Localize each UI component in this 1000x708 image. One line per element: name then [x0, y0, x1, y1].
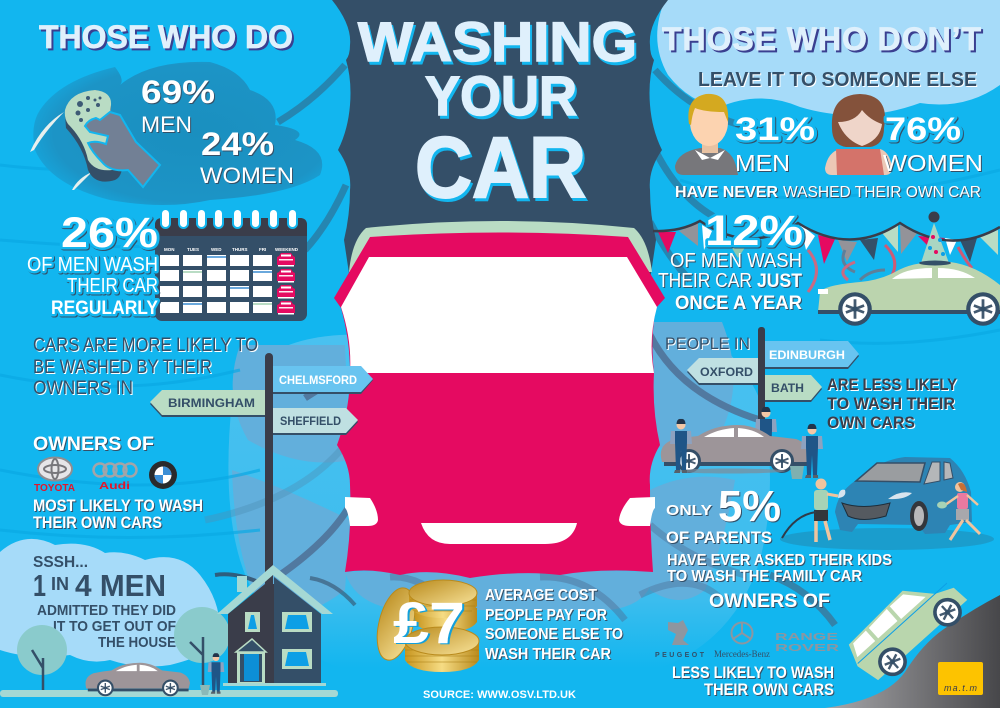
icon: man	[675, 94, 738, 175]
stat: 24% women: WOMEN	[200, 163, 294, 188]
bunting	[653, 221, 1000, 292]
grey car small	[86, 663, 190, 696]
text: sssh 1 in 4 men	[33, 554, 176, 651]
logo: peugeot	[655, 620, 705, 659]
stat: 69% men	[141, 74, 215, 137]
logo: peugeot: PEUGEOT	[655, 652, 705, 659]
logo: range rover: RANGE	[775, 632, 839, 643]
title: YOUR	[425, 64, 577, 127]
car roof outline	[349, 221, 652, 272]
title: WASHING	[358, 10, 637, 73]
heading: those who do: THOSE WHO DO	[39, 19, 293, 55]
tilted coin	[371, 584, 421, 664]
stat: 26% of men wash regularly: 26%	[61, 209, 158, 257]
car body	[334, 232, 665, 578]
blue-grey panels behind car	[232, 322, 735, 614]
logos: toyota audi bmw	[34, 458, 177, 494]
stat: only 5% of parents: 5%	[718, 482, 781, 531]
text: less likely to wash	[672, 663, 834, 699]
cloud: bottom left	[0, 539, 220, 667]
text: have never washed	[675, 184, 981, 201]
background swooshes	[205, 65, 835, 625]
stat: 31% men: 31%	[735, 111, 815, 147]
right headlight	[619, 497, 655, 526]
text: have never washed: WASHED THEIR OWN CAR	[783, 184, 981, 201]
stat: 31% men	[735, 111, 815, 176]
text: average cost: SOMEONE ELSE TO	[485, 626, 623, 643]
windscreen	[341, 257, 657, 373]
stat: 12% once a year: JUST	[757, 271, 802, 292]
glove	[85, 112, 160, 187]
stat: 12% once a year	[658, 207, 803, 314]
central title panel	[332, 0, 668, 280]
sign: edinburgh	[765, 341, 859, 369]
text: sssh 1 in 4 men: THE HOUSE	[98, 634, 176, 651]
stat: 76% women: 76%	[885, 111, 961, 147]
sign: oxford	[687, 358, 758, 385]
text: less likely to wash: LESS LIKELY TO WASH	[672, 663, 834, 682]
stat: only 5% of parents: OF PARENTS	[666, 528, 772, 547]
family washing blue car	[780, 457, 994, 550]
text: cars more likely washed: OWNERS IN	[33, 378, 133, 399]
party hat	[919, 212, 951, 266]
signpost: right	[687, 327, 859, 427]
icon: sponge and gloved hand	[30, 90, 160, 190]
stat: 76% women	[883, 111, 983, 176]
logo: audi: Audi	[99, 481, 130, 492]
icon: calendar: WED	[211, 247, 222, 252]
logo: toyota	[34, 458, 75, 494]
text: cars more likely washed	[33, 335, 258, 399]
text: have never washed: HAVE NEVER	[675, 184, 778, 201]
stat: only 5% of parents	[666, 482, 892, 585]
stat: 69% men: MEN	[141, 112, 192, 137]
stat: only 5% of parents: HAVE EVER ASKED THEIR KIDS	[667, 552, 892, 569]
man with bucket	[200, 653, 224, 695]
cloud: top right	[657, 0, 1000, 115]
tree right	[174, 607, 230, 686]
dark cloud behind sponge	[33, 62, 322, 205]
subheading: leave it to someone else: LEAVE IT TO SOMEONE ELSE	[698, 69, 977, 91]
light lobes behind car	[228, 322, 770, 668]
sign: bath: BATH	[771, 383, 804, 395]
logo: matm yellow box	[938, 662, 983, 695]
green car with party hat	[818, 212, 1000, 326]
icon: woman	[825, 94, 892, 175]
girl	[937, 482, 980, 540]
hill	[825, 595, 1000, 708]
text: average cost: WASH THEIR CAR	[485, 646, 611, 663]
logos: peugeot mercedes range rover	[655, 620, 840, 659]
stat: 31% men: MEN	[735, 150, 790, 176]
icon: calendar	[155, 209, 307, 321]
sign: sheffield: SHEFFIELD	[280, 416, 341, 428]
text: are less likely: ARE LESS LIKELY	[827, 375, 958, 394]
text: sssh 1 in 4 men: 1	[33, 568, 46, 603]
logo: mercedes	[714, 622, 770, 659]
sign: chelmsford: CHELMSFORD	[279, 375, 357, 387]
logo: mercedes: Mercedes-Benz	[714, 649, 770, 659]
heading: owners of, left: OWNERS OF	[33, 434, 154, 455]
stat: 26% of men wash regularly: REGULARLY	[51, 298, 158, 319]
stat: 12% once a year: OF MEN WASH	[670, 250, 802, 272]
text: most likely to wash: MOST LIKELY TO WASH	[33, 496, 203, 515]
icon: calendar: MON	[164, 247, 174, 252]
grille	[421, 523, 577, 544]
text: cars more likely washed: BE WASHED BY THEIR	[33, 357, 212, 378]
icon: calendar: WEEKEND	[275, 247, 299, 252]
logo: range rover	[775, 632, 840, 654]
text: less likely to wash: THEIR OWN CARS	[704, 680, 834, 699]
source: SOURCE: WWW.OSV.LTD.UK	[423, 689, 576, 701]
stat: 24% women	[200, 126, 294, 188]
text: sssh 1 in 4 men: SSSH...	[33, 554, 88, 571]
heading: those who don't: THOSE WHO DON’T	[662, 21, 981, 57]
icon: calendar: FRI	[259, 247, 266, 252]
sign: oxford: OXFORD	[700, 367, 753, 379]
left headlight	[345, 497, 378, 526]
stat: 76% women: WOMEN	[883, 150, 983, 176]
sponge	[65, 90, 119, 170]
text: sssh 1 in 4 men: 4 MEN	[75, 568, 166, 603]
signpost: left	[150, 353, 373, 593]
stat: 24% women: 24%	[201, 126, 274, 162]
text: are less likely	[827, 375, 958, 432]
stat: 26% of men wash regularly: THEIR CAR	[67, 275, 158, 297]
middle coin	[415, 608, 477, 632]
street scene: house, trees, car, man	[0, 565, 338, 697]
text: are less likely: TO WASH THEIR	[827, 394, 955, 413]
text: sssh 1 in 4 men: IT TO GET OUT OF	[53, 618, 176, 635]
coins and £7	[371, 580, 479, 672]
logo: audi	[94, 464, 136, 492]
streamers	[808, 245, 972, 292]
stat: only 5% of parents: TO WASH THE FAMILY CAR	[667, 568, 862, 585]
bottom coin stack	[405, 642, 479, 672]
icon: calendar: TUES	[187, 247, 199, 252]
stat: 26% of men wash regularly	[27, 209, 158, 319]
logo: range rover: ROVER	[775, 643, 840, 654]
sign: chelmsford	[273, 366, 373, 394]
sign: birmingham	[150, 390, 265, 417]
central car front	[334, 221, 665, 578]
coins and £7: £7	[393, 591, 465, 656]
hose	[782, 512, 816, 538]
text: average cost: AVERAGE COST	[485, 587, 597, 604]
logo: toyota: TOYOTA	[34, 483, 75, 494]
tree left	[17, 625, 67, 690]
title	[358, 10, 637, 216]
stat: 12% once a year: ONCE A YEAR	[675, 293, 802, 314]
heading: owners of, right: OWNERS OF	[709, 591, 830, 612]
top coin	[409, 593, 477, 618]
logo: matm yellow box: ma.t.m	[944, 683, 978, 693]
text: most likely to wash: THEIR OWN CARS	[33, 513, 162, 532]
stat: only 5% of parents: ONLY	[666, 502, 712, 519]
sign: sheffield	[273, 408, 358, 435]
green car on hill	[840, 563, 974, 692]
stat: 26% of men wash regularly: OF MEN WASH	[27, 254, 158, 276]
stat: 12% once a year: THEIR CAR	[658, 270, 752, 292]
sign: birmingham: BIRMINGHAM	[168, 398, 255, 410]
house	[217, 565, 333, 686]
grey car with workers	[661, 407, 823, 479]
text: cars more likely washed: CARS ARE MORE LIKELY TO	[33, 335, 258, 356]
logo: bmw	[149, 461, 177, 489]
ground	[0, 690, 338, 697]
title: CAR	[415, 120, 586, 216]
sign: edinburgh: EDINBURGH	[769, 350, 845, 362]
boy	[814, 478, 838, 542]
text: sssh 1 in 4 men: ADMITTED THEY DID	[37, 602, 176, 619]
text: people in: PEOPLE IN	[665, 334, 750, 353]
text: average cost	[485, 587, 623, 663]
icon: calendar: THURS	[232, 247, 248, 252]
gold coins	[371, 580, 479, 672]
text: average cost: PEOPLE PAY FOR	[485, 607, 607, 624]
sponge shadow	[65, 90, 122, 182]
sign: bath	[765, 375, 822, 402]
stat: 12% once a year: 12%	[705, 207, 803, 255]
text: most likely to wash	[33, 496, 203, 532]
text: are less likely: OWN CARS	[827, 413, 915, 432]
stat: 69% men: 69%	[141, 74, 215, 110]
text: sssh 1 in 4 men: IN	[51, 574, 69, 594]
